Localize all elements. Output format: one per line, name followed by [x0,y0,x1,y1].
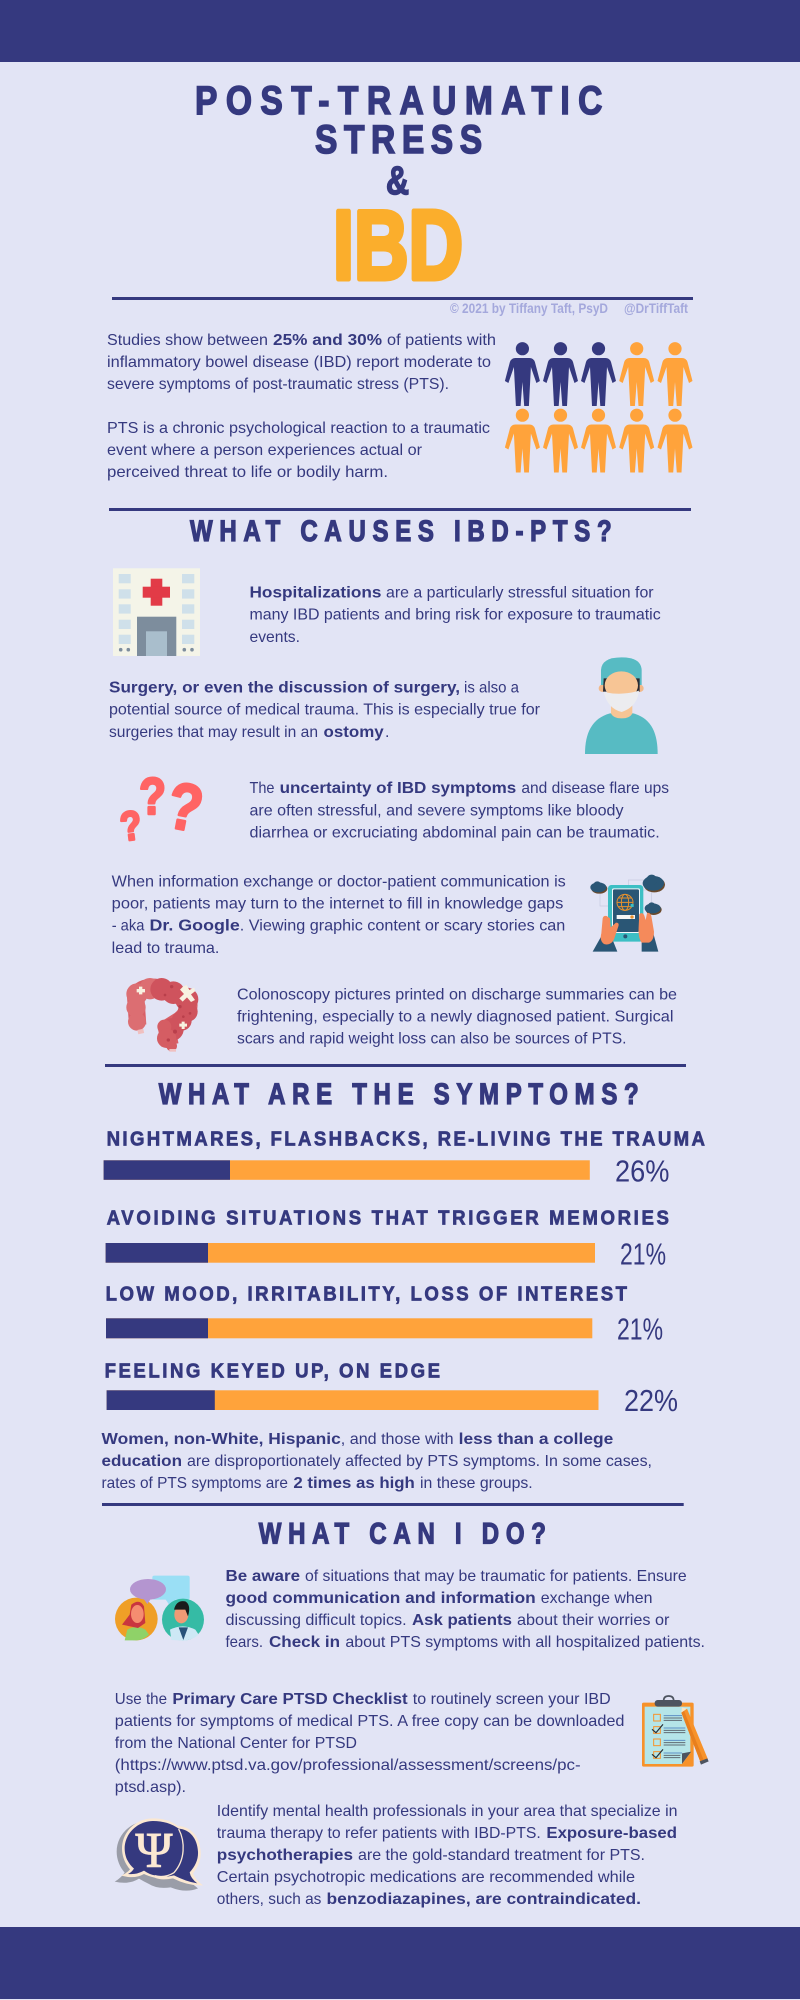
text: uncertainty: and disease flare ups [521,780,669,797]
text: be aware [226,1568,705,1651]
symptom 2: AVOIDING SITUATIONS THAT TRIGGER MEMORIES [107,1207,669,1230]
text: PTSD checklist: ptsd.asp). [115,1779,186,1796]
text: be aware: Ask patients [412,1612,512,1629]
text: affected groups: 2 times as high [293,1475,415,1492]
icon: question marks: ? [139,768,166,826]
text: PTSD checklist: Primary Care PTSD Checklist [172,1691,408,1708]
text: dr google: . Viewing graphic content or scary stories can [240,918,565,935]
text: affected groups: are disproportionately affected by PTS symptoms. In some cases, [187,1453,652,1470]
text: dr google: poor, patients may turn to the internet to fill in knowledge gaps [112,896,563,913]
text: surgery: . [385,724,389,741]
text: colonoscopy pictures [237,986,677,1048]
icon: question marks: ? [118,803,144,851]
title: IBD [333,190,463,300]
text: be aware: of situations that may be traumatic for patients. Ensure [305,1568,687,1585]
text: surgery [109,680,541,741]
intro text: of patients with [387,332,496,349]
text: affected groups: rates of PTS symptoms are [102,1475,288,1492]
text: PTSD checklist [115,1691,625,1796]
text: uncertainty: diarrhea or excruciating abdominal pain can be traumatic. [250,824,660,842]
symptom 2 [106,1207,669,1271]
icon: surgeon [585,657,658,754]
intro text [107,332,496,481]
text: hospitalizations: are a particularly stressful situation for [386,584,654,602]
intro text: perceived threat to life or bodily harm. [107,464,388,481]
heading: symptoms: WHAT ARE THE SYMPTOMS? [159,1076,639,1111]
symptom 4: FEELING KEYED UP, ON EDGE [105,1360,440,1383]
pictogram: 3 of 10 people [505,342,692,472]
icon: phone with internet clouds [590,875,665,952]
text: colonoscopy pictures: Colonoscopy pictures printed on discharge summaries can be [237,986,677,1003]
heading: what causes: WHAT CAUSES IBD-PTS? [190,513,612,548]
intro text: PTS is a chronic psychological reaction to a traumatic [107,420,490,437]
symptom 1: 26% [615,1154,669,1189]
symptom 4: 22% [624,1383,678,1418]
text: PTSD checklist: to routinely screen your IBD [413,1691,611,1708]
text: be aware: fears. [226,1634,263,1651]
credit line: @DrTiffTaft [624,300,688,316]
symptom 1 [104,1128,705,1189]
text: hospitalizations [250,584,661,646]
icon: psychology speech bubble [115,1818,203,1891]
text: affected groups: less than a college [459,1431,613,1448]
text: hospitalizations: Hospitalizations [250,584,382,602]
header band [0,0,800,62]
text: mental health referrals: benzodiazapines, are contraindicated. [326,1891,641,1908]
title [195,78,602,300]
text: mental health referrals: others, such as [217,1891,321,1908]
text: be aware: good communication and information [226,1590,536,1607]
text: uncertainty: The [250,780,275,797]
text: colonoscopy pictures: scars and rapid weight loss can also be sources of PTS. [237,1031,626,1048]
text: hospitalizations: events. [250,629,300,646]
text: hospitalizations: many IBD patients and bring risk for exposure to traumatic [250,607,661,624]
text: dr google [112,873,566,957]
text: dr google: Dr. Google [150,918,240,935]
text: mental health referrals: Exposure-based [546,1825,677,1842]
symptom 3: 21% [617,1311,663,1346]
footer band [0,1927,800,1999]
text: be aware: about PTS symptoms with all hospitalized patients. [345,1634,705,1651]
intro text: Studies show between [107,332,268,349]
heading: what can I do: WHAT CAN I DO? [259,1516,546,1550]
icon: patient and doctor conversation [115,1576,204,1641]
text: surgery: surgeries that may result in an [109,724,318,741]
text: dr google: - aka [112,918,144,935]
icon: question marks: ? [161,768,209,846]
symptom 4 [105,1360,678,1418]
text: mental health referrals: Certain psychotropic medications are recommended while [217,1869,635,1886]
text: surgery: Surgery, or even the discussion of surgery, [109,680,460,696]
credit line: © 2021 by Tiffany Taft, PsyD [450,300,608,316]
icon: clipboard checklist [642,1696,709,1767]
title: & [386,158,409,203]
text: be aware: about their worries or [517,1612,670,1629]
icon: hospital [113,568,200,656]
text: affected groups: in these groups. [420,1475,533,1492]
text: mental health referrals: psychotherapies [217,1847,353,1864]
text: mental health referrals: are the gold-standard treatment for PTS. [358,1847,645,1864]
title: STRESS [315,117,482,162]
intro text: event where a person experiences actual or [107,442,423,459]
text: dr google: When information exchange or doctor-patient communication is [112,873,566,890]
icon: colon [126,978,198,1052]
symptom 2: 21% [620,1236,666,1271]
title: POST-TRAUMATIC [195,78,602,123]
text: surgery: ostomy [324,724,384,741]
text: be aware: Be aware [226,1568,300,1585]
text: affected groups [102,1431,652,1492]
icon: question marks [118,768,209,851]
text: be aware: discussing difficult topics. [226,1612,407,1629]
text: uncertainty [250,780,669,842]
text: surgery: is also a [464,680,519,696]
symptom 3: LOW MOOD, IRRITABILITY, LOSS OF INTEREST [106,1283,627,1306]
text: affected groups: Women, non-White, Hispanic [102,1431,341,1448]
text: mental health referrals: trauma therapy to refer patients with IBD-PTS. [217,1825,541,1842]
symptom 3 [106,1283,663,1346]
text: dr google: lead to trauma. [112,940,219,957]
text: PTSD checklist: (https://www.ptsd.va.gov/professional/assessment/screens/pc- [115,1757,581,1774]
text: affected groups: , and those with [341,1431,454,1448]
symptom 1: NIGHTMARES, FLASHBACKS, RE-LIVING THE TRAUMA [107,1128,705,1151]
text: colonoscopy pictures: frightening, especially to a newly diagnosed patient. Surgical [237,1008,674,1025]
text: uncertainty: are often stressful, and severe symptoms like bloody [250,802,624,819]
intro text: inflammatory bowel disease (IBD) report moderate to [107,354,491,371]
text: surgery: potential source of medical trauma. This is especially true for [109,702,541,719]
text: uncertainty: uncertainty of IBD symptoms [280,780,516,797]
text: be aware: exchange when [541,1590,652,1607]
intro text: 25% and 30% [273,332,382,349]
text: affected groups: education [102,1453,182,1470]
text: mental health referrals [217,1803,678,1908]
text: be aware: Check in [269,1634,340,1651]
text: mental health referrals: Identify mental health professionals in your area that specialize in [217,1803,678,1820]
text: PTSD checklist: patients for symptoms of medical PTS. A free copy can be downloaded [115,1713,625,1730]
intro text: severe symptoms of post-traumatic stress (PTS). [107,376,449,393]
text: PTSD checklist: from the National Center for PTSD [115,1735,357,1752]
icon: psychology speech bubble: Ψ [136,1822,173,1878]
text: PTSD checklist: Use the [115,1691,167,1708]
bar chart: symptoms [104,1128,705,1418]
